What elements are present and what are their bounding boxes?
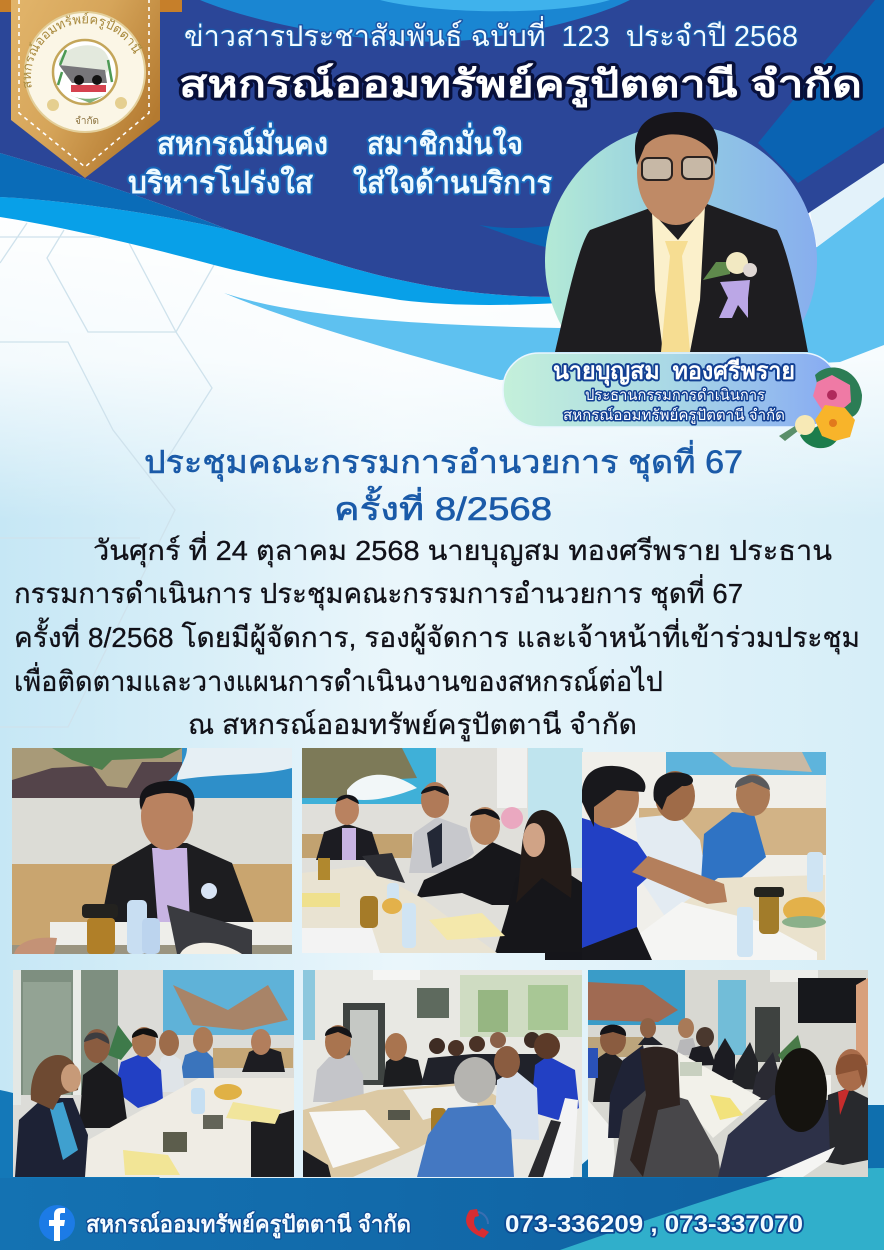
icon: facebook bbox=[39, 1205, 75, 1241]
footer: phone numbers: 073-336209 , 073-337070 bbox=[505, 1211, 803, 1238]
photo 1: chairman at table bbox=[12, 748, 292, 954]
badge with cooperative logo bbox=[0, 0, 182, 178]
header: issue line: ข่าวสารประชาสัมพันธ์ ฉบับที่ 123 ประจำปี 2568 bbox=[184, 16, 798, 53]
photo 5: table view with window bbox=[303, 970, 582, 1177]
photo 2: meeting with four participants bbox=[302, 748, 583, 953]
header: cooperative name: สหกรณ์ออมทรัพย์ครูปัตตานี จำกัด bbox=[179, 63, 862, 108]
footer: facebook page name: สหกรณ์ออมทรัพย์ครูปัตตานี จำกัด bbox=[86, 1211, 411, 1239]
slogans: ใส่ใจด้านบริการ bbox=[353, 165, 552, 200]
slogans: สมาชิกมั่นใจ bbox=[367, 122, 523, 161]
heading: meeting title bbox=[144, 440, 743, 527]
icon: tropical flowers bbox=[779, 368, 862, 448]
photo 6: table view from the right bbox=[588, 970, 868, 1177]
slogans bbox=[128, 122, 552, 200]
slogans: บริหารโปร่งใส bbox=[128, 164, 314, 200]
name plate bbox=[503, 353, 839, 427]
heading: meeting title: ประชุมคณะกรรมการอำนวยการ ชุดที่ 67 bbox=[144, 440, 743, 482]
icon: phone bbox=[466, 1209, 489, 1238]
body text bbox=[14, 531, 860, 742]
body text: ณ สหกรณ์ออมทรัพย์ครูปัตตานี จำกัด bbox=[188, 709, 637, 742]
name plate: สหกรณ์ออมทรัพย์ครูปัตตานี จำกัด bbox=[563, 407, 785, 424]
photo 3: blue shirt participants bbox=[545, 752, 826, 960]
body text: วันศุกร์ ที่ 24 ตุลาคม 2568 นายบุญสม ทองศรีพราย ประธาน bbox=[93, 531, 832, 568]
slogans: สหกรณ์มั่นคง bbox=[157, 122, 328, 161]
name plate: นายบุญสม ทองศรีพราย bbox=[553, 358, 795, 387]
body text: ครั้งที่ 8/2568 โดยมีผู้จัดการ, รองผู้จัดการ และเจ้าหน้าที่เข้าร่วมประชุม bbox=[14, 617, 860, 655]
portrait: chairman in circle bbox=[545, 112, 817, 397]
badge with cooperative logo: จำกัด bbox=[75, 116, 99, 127]
heading: meeting title: ครั้งที่ 8/2568 bbox=[334, 486, 552, 527]
name plate: ประธานกรรมการดำเนินการ bbox=[585, 387, 765, 404]
photo 4: table view from the left bbox=[13, 970, 294, 1177]
body text: กรรมการดำเนินการ ประชุมคณะกรรมการอำนวยการ ชุดที่ 67 bbox=[14, 574, 743, 611]
body text: เพื่อติดตามและวางแผนการดำเนินงานของสหกรณ์ต่อไป bbox=[14, 662, 663, 697]
badge with cooperative logo: สหกรณ์ออมทรัพย์ครูปัตตานี bbox=[23, 12, 142, 88]
